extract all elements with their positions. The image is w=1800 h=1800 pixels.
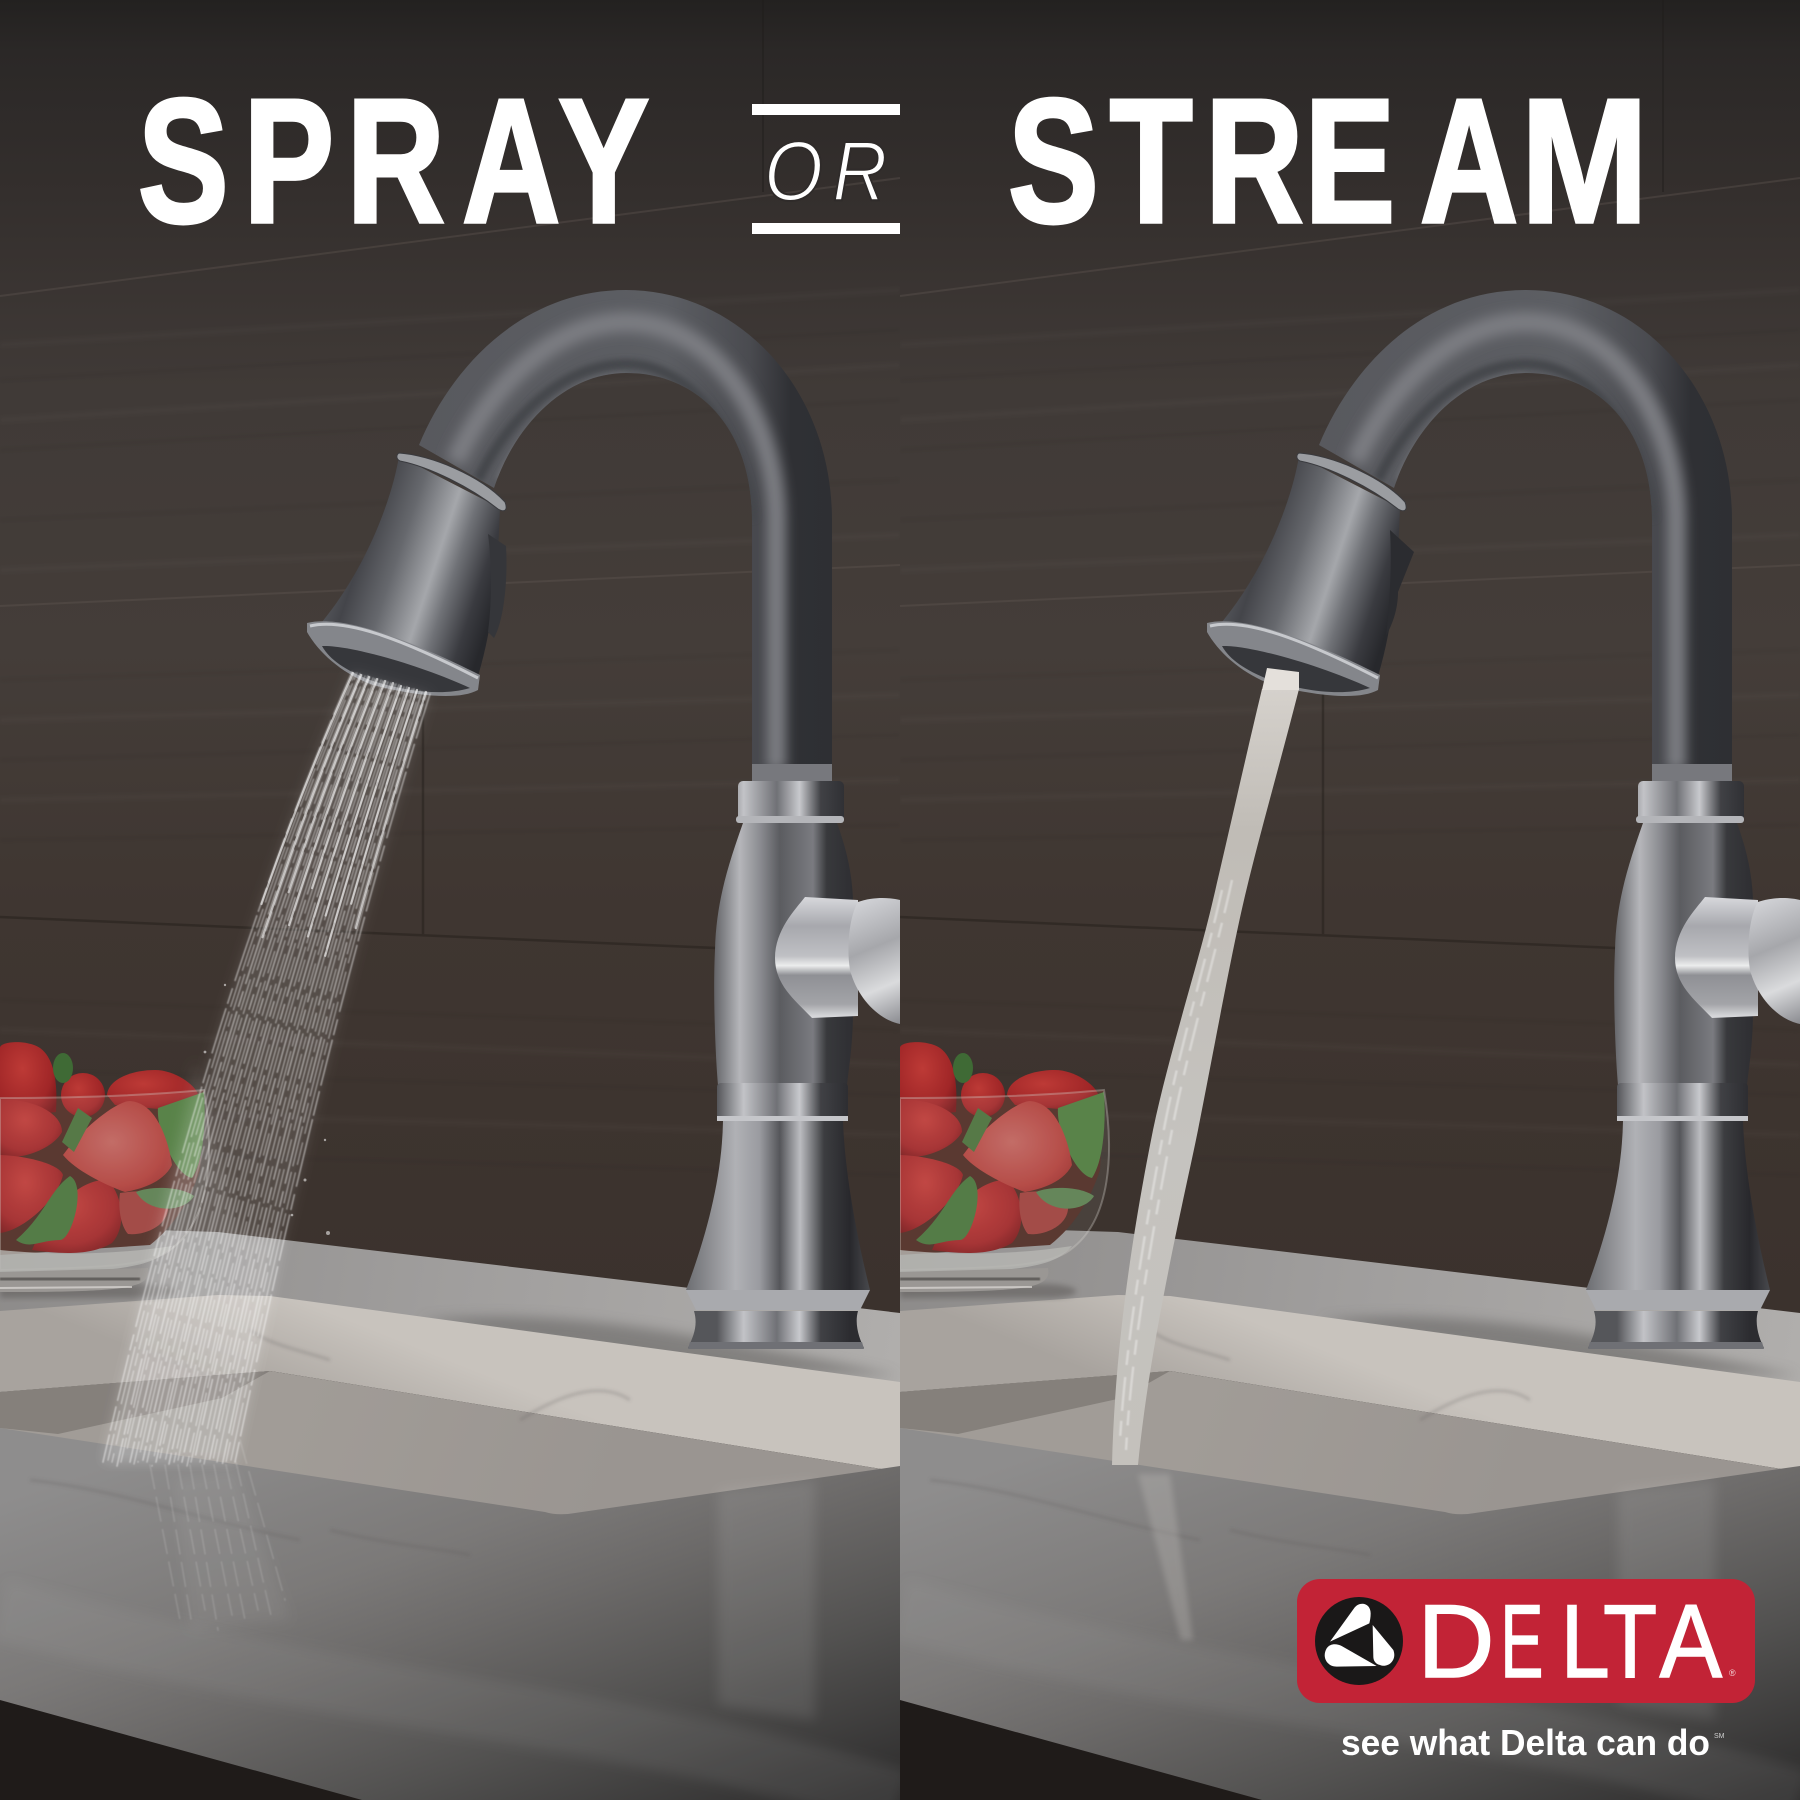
strawberries in glass bowl <box>0 1042 209 1298</box>
tiled wall background <box>900 0 1800 1340</box>
tagline: see what Delta can do <box>1341 1722 1710 1763</box>
heading: STREAM: STREA <box>1008 63 1518 260</box>
wordmark: LT <box>1561 1584 1657 1700</box>
water stream <box>1112 668 1299 1640</box>
wordmark: D <box>1417 1583 1495 1700</box>
strawberries in glass bowl <box>900 1042 1109 1298</box>
heading: SPRAY: SPRAY <box>138 63 649 260</box>
wordmark: E <box>1500 1584 1543 1700</box>
icon: Delta triangle <box>1315 1597 1403 1685</box>
heading: STREAM: M <box>1521 63 1648 261</box>
faucet stream button <box>1389 530 1414 630</box>
wordmark: A <box>1660 1582 1722 1699</box>
OR divider: OR <box>764 124 887 218</box>
marble counter and sink <box>0 1225 900 1800</box>
logo: Delta <box>1297 1579 1755 1703</box>
registered mark: ® <box>1729 1668 1736 1678</box>
OR divider <box>752 104 900 234</box>
marble counter and sink <box>900 1225 1800 1800</box>
chrome faucet <box>1207 290 1800 1349</box>
faucet spray button <box>488 534 506 638</box>
tiled wall background <box>0 0 900 1340</box>
panel: spray <box>0 0 900 1800</box>
water spray <box>103 672 430 1630</box>
panel: stream <box>900 0 1800 1800</box>
wordmark <box>1417 1582 1722 1700</box>
logo background <box>1297 1579 1755 1703</box>
overlay: title <box>138 63 1648 261</box>
chrome faucet <box>307 290 900 1349</box>
tagline: SM <box>1714 1733 1725 1740</box>
